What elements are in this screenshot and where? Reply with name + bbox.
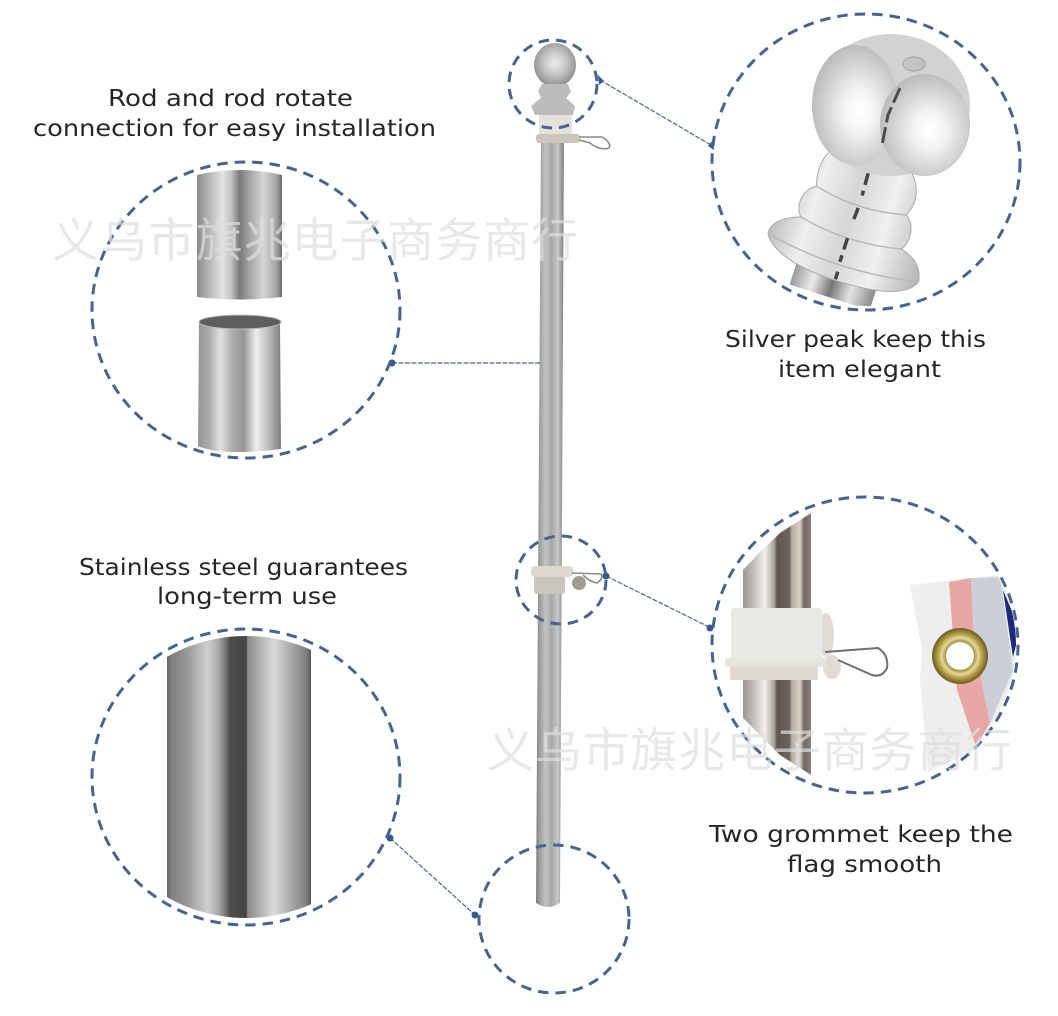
knob drawing <box>768 34 970 306</box>
flag red band <box>949 578 993 747</box>
panel: silver peak detail <box>712 14 1020 322</box>
marker circle: pole end <box>479 845 629 993</box>
connector: finial to detail <box>598 75 714 150</box>
panel: rod connection detail <box>92 162 400 458</box>
caption: stainless steel <box>79 555 408 610</box>
steel cylinder <box>167 620 311 930</box>
clip nubs <box>818 613 841 679</box>
lower rod opening <box>199 315 281 329</box>
upper rod piece <box>197 170 282 300</box>
middle sleeve <box>534 572 565 594</box>
snap clip wire <box>825 648 887 676</box>
lower rod piece <box>198 322 281 452</box>
knob ball base <box>848 34 970 176</box>
panel: grommet detail <box>712 497 1025 793</box>
white ring <box>725 658 826 667</box>
connector: steel to detail <box>386 834 478 918</box>
caption: silver peak: item elegant <box>778 357 941 383</box>
knob cleft <box>882 88 900 145</box>
connector: rod joint to detail <box>388 360 540 366</box>
detail ring <box>712 497 1018 793</box>
knob dark slit <box>834 173 869 279</box>
caption: grommet: Two grommet keep the <box>708 822 1013 848</box>
knob collar shading <box>768 186 918 282</box>
watermark upper: 义乌市旗兆电子商务商行 <box>52 214 578 267</box>
flag corner white <box>910 575 1025 772</box>
grommet <box>932 628 988 684</box>
knob top hole <box>903 57 925 71</box>
caption: silver peak <box>725 327 986 383</box>
caption: rod connection: connection for easy installation <box>33 116 436 142</box>
top sleeve <box>539 115 572 136</box>
flag corner <box>910 575 1025 772</box>
middle thumb nut <box>572 576 586 590</box>
flag grey band <box>971 577 1013 723</box>
knob ball right lobe <box>880 74 970 176</box>
top clip wire <box>579 137 610 149</box>
caption: grommet <box>708 822 1013 878</box>
finial collars <box>531 84 575 115</box>
detail ring <box>92 162 400 458</box>
detail rod <box>743 513 811 775</box>
caption: rod connection: Rod and rod rotate <box>108 86 353 112</box>
knob collar silhouette <box>768 152 920 292</box>
flag blue edge <box>1003 590 1016 657</box>
middle clip wire <box>572 573 602 583</box>
caption: grommet: flag smooth <box>787 852 942 878</box>
pole shaft <box>536 130 564 907</box>
caption: rod connection <box>33 86 436 142</box>
connector: grommet to detail <box>602 572 714 632</box>
white sleeve <box>731 608 822 660</box>
rod pieces <box>197 170 282 452</box>
caption: stainless steel: long-term use <box>157 584 337 610</box>
detail ring <box>92 629 400 925</box>
marker circle: finial <box>509 40 597 128</box>
caption: silver peak: Silver peak keep this <box>725 327 986 353</box>
top sleeve ring <box>536 134 580 143</box>
detail ring <box>712 14 1020 310</box>
flag pole <box>531 43 610 907</box>
watermark lower: 义乌市旗兆电子商务商行 <box>487 724 1012 777</box>
marker circle: grommet clip <box>516 536 606 624</box>
caption: stainless steel: Stainless steel guarantees <box>79 555 408 581</box>
top finial ball <box>534 43 576 87</box>
middle ring <box>531 566 573 577</box>
knob rod <box>790 264 876 306</box>
white ring lower <box>730 666 818 680</box>
knob ball left lobe <box>812 45 898 165</box>
panel: stainless steel detail <box>92 620 400 930</box>
